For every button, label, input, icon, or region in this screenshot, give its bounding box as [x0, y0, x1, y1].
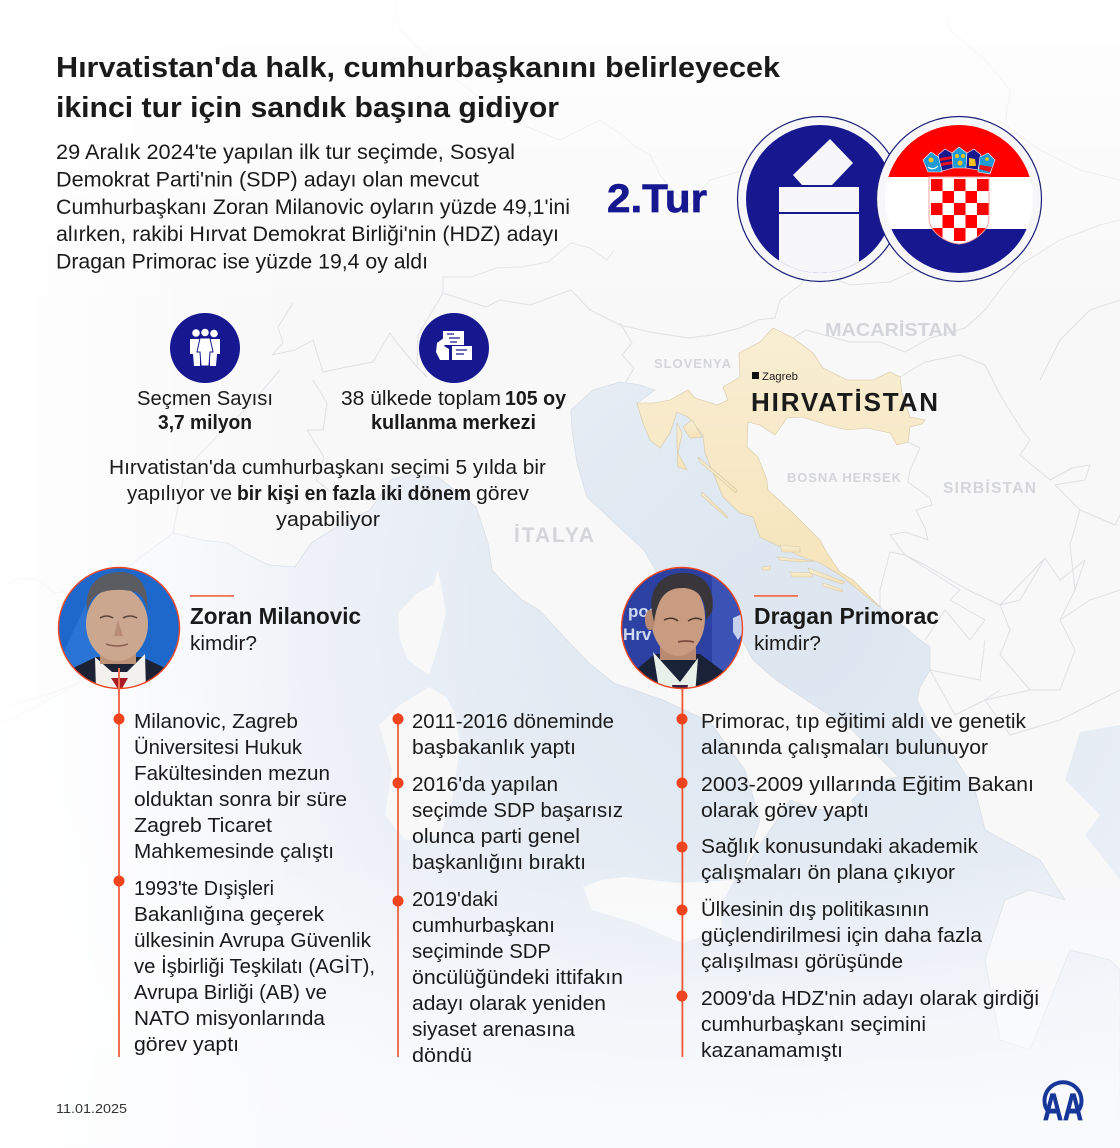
stat: polling stations: 38 ülkede toplam: [341, 388, 501, 410]
bullet text: genetics: alanında çalışmaları bulunuyor: [701, 736, 988, 759]
intro text: Demokrat Parti'nin (SDP) adayı olan mevcut: [56, 168, 479, 192]
heading: Dragan Primorac: [754, 595, 939, 655]
stat: polling stations: kullanma merkezi: [371, 412, 536, 434]
bullet text: 2019 election: adayı olarak yeniden: [412, 992, 606, 1015]
bullet text: foreign ministry: ve İşbirliği Teşkilatı (AGİT),: [134, 955, 375, 978]
bullet text: 2009 election: kazanamamıştı: [701, 1039, 843, 1062]
heading: Dragan Primorac: kimdir?: [754, 633, 821, 655]
bullet text: genetics: [701, 710, 1027, 759]
stat: polling stations: [341, 388, 567, 434]
bullet text: education: Mahkemesinde çalıştı: [134, 840, 334, 863]
bullet text: prime minister: başbakanlık yaptı: [412, 736, 576, 759]
bullet text: education: Fakültesinden mezun: [134, 762, 330, 785]
flag shield: [931, 179, 988, 244]
bullet text: education minister: 2003-2009 yıllarında Eğitim Bakanı: [701, 773, 1034, 796]
bullet text: foreign ministry: NATO misyonlarında: [134, 1007, 326, 1030]
note paragraph: yapılıyor ve: [127, 483, 232, 505]
map label: Slovenya: SLOVENYA: [654, 356, 732, 371]
bullet text: foreign ministry: Avrupa Birliği (AB) ve: [134, 981, 327, 1004]
bullet text: 2016 election: 2016'da yapılan: [412, 773, 558, 796]
intro text: Dragan Primorac ise yüzde 19,4 oy aldı: [56, 250, 428, 274]
bullet text: foreign ministry: ülkesinin Avrupa Güvenlik: [134, 929, 372, 952]
intro text: [56, 141, 570, 274]
stat: voters: [137, 388, 273, 434]
bullet text: 2009 election: cumhurbaşkanı seçimini: [701, 1013, 926, 1036]
icon: ballot papers: [419, 313, 489, 383]
bullet text: 2019 election: cumhurbaşkanı: [412, 914, 555, 937]
map label: Sirbistan: SIRBİSTAN: [943, 480, 1036, 497]
timeline column 3: [676, 688, 1039, 1062]
heading: Dragan Primorac: Dragan Primorac: [754, 603, 939, 629]
title: ikinci tur için sandık başına gidiyor: [56, 92, 559, 124]
bullet text: 2016 election: [412, 773, 623, 874]
portrait: Dragan Primorac: [620, 565, 747, 695]
date: 11.01.2025: [56, 1101, 127, 1116]
icon: Croatian flag: [876, 116, 1042, 282]
bullet text: health academics: [701, 835, 979, 884]
logo: AA: [1043, 1082, 1083, 1129]
title: [56, 52, 781, 124]
icon: ballot box: [738, 116, 902, 282]
intro text: alırken, rakibi Hırvat Demokrat Birliği'nin (HDZ) adayı: [56, 223, 559, 246]
bullet text: 2019 election: seçiminde SDP: [412, 940, 551, 963]
bullet text: health academics: çalışmaları ön plana çıkıyor: [701, 861, 955, 884]
bullet text: foreign ministry: Bakanlığına geçerek: [134, 903, 325, 926]
bullet text: education minister: olarak görev yaptı: [701, 799, 869, 822]
note paragraph: Hırvatistan'da cumhurbaşkanı seçimi 5 yılda bir: [109, 457, 546, 479]
map label: Bosna Hersek: BOSNA HERSEK: [787, 470, 902, 485]
timeline column 2: [392, 710, 623, 1067]
stat: voters: Seçmen Sayısı: [137, 388, 273, 410]
bullet text: health academics: Sağlık konusundaki akademik: [701, 835, 979, 858]
bullet text: education: Zagreb Ticaret: [134, 814, 272, 837]
bullet text: foreign policy: çalışılması görüşünde: [701, 950, 903, 973]
bullet text: 2019 election: öncülüğündeki ittifakın: [412, 966, 623, 989]
intro text: 29 Aralık 2024'te yapılan ilk tur seçimde, Sosyal: [56, 141, 515, 164]
bullet text: education: Milanovic, Zagreb: [134, 710, 298, 733]
title: Hırvatistan'da halk, cumhurbaşkanını belirleyecek: [56, 52, 781, 84]
heading: Zoran Milanovic: Zoran Milanovic: [190, 603, 361, 629]
note paragraph: yapabiliyor: [276, 509, 380, 531]
note paragraph: bir kişi en fazla iki dönem: [237, 483, 471, 505]
bullet text: education minister: [701, 773, 1034, 822]
round label: 2.Tur: 2.Tur: [607, 177, 707, 221]
portrait: Zoran Milanovic: [58, 566, 180, 690]
bullet text: foreign ministry: [134, 877, 375, 1056]
portrait: Dragan Primorac: Hrv: [623, 625, 652, 644]
bullet text: education: [134, 710, 347, 863]
stat: polling stations: 105 oy: [505, 388, 567, 410]
bullet text: prime minister: [412, 710, 614, 759]
bullet text: foreign ministry: 1993'te Dışişleri: [134, 877, 274, 900]
map label: Italya: İTALYA: [514, 524, 594, 547]
bullet text: education: olduktan sonra bir süre: [134, 788, 347, 811]
bullet text: foreign policy: güçlendirilmesi için daha fazla: [701, 924, 983, 947]
intro text: Cumhurbaşkanı Zoran Milanovic oyların yüzde 49,1'ini: [56, 196, 570, 219]
bullet text: 2019 election: [412, 888, 623, 1067]
map label: Hirvatistan: HIRVATİSTAN: [751, 387, 938, 417]
flag crown: [923, 147, 995, 174]
map label: Macaristan: MACARİSTAN: [825, 320, 957, 340]
map: Croatia: [637, 328, 925, 607]
bullet text: prime minister: 2011-2016 döneminde: [412, 710, 614, 733]
bullet text: 2019 election: 2019'daki: [412, 888, 498, 911]
timeline column 1: [114, 668, 375, 1057]
bullet text: foreign policy: Ülkesinin dış politikasının: [701, 898, 929, 921]
portrait: Dragan Primorac: pos: [628, 602, 658, 621]
bullet text: 2016 election: başkanlığını bıraktı: [412, 851, 586, 874]
bullet text: 2019 election: siyaset arenasına: [412, 1018, 576, 1041]
capital marker: Zagreb: Zagreb: [762, 371, 798, 383]
note paragraph: [109, 457, 546, 531]
heading: Zoran Milanovic: [190, 595, 361, 655]
logo: AA: AA: [1043, 1087, 1083, 1129]
bullet text: foreign ministry: görev yaptı: [134, 1033, 239, 1056]
bullet text: genetics: Primorac, tıp eğitimi aldı ve genetik: [701, 710, 1027, 733]
stat: voters: 3,7 milyon: [158, 412, 252, 434]
bullet text: 2016 election: olunca parti genel: [412, 825, 580, 848]
bullet text: 2009 election: [701, 987, 1039, 1062]
note paragraph: görev: [476, 483, 529, 505]
bullet text: education: Üniversitesi Hukuk: [134, 736, 303, 759]
bullet text: 2009 election: 2009'da HDZ'nin adayı olarak girdiği: [701, 987, 1039, 1010]
bullet text: 2016 election: seçimde SDP başarısız: [412, 799, 623, 822]
icon: voters: [170, 313, 240, 383]
heading: Zoran Milanovic: kimdir?: [190, 633, 257, 655]
bullet text: foreign policy: [701, 898, 983, 973]
bullet text: 2019 election: döndü: [412, 1044, 472, 1067]
